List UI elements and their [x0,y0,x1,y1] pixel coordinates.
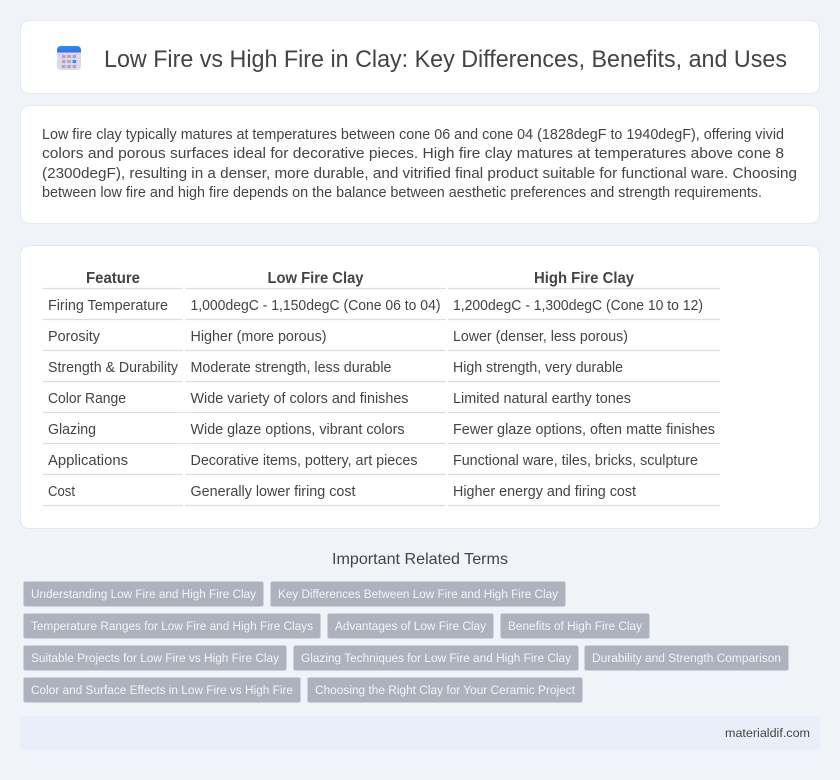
row: applications [48,453,698,469]
title: Low Fire vs High Fire in Clay: Key Differences, Benefits, and Uses [104,46,787,73]
row: applications: Applications [48,453,128,469]
row: porosity [48,329,628,345]
intro text: between low fire and high fire depends on the balance between aesthetic preferences and strength requirements. [42,185,762,201]
table header [86,270,634,287]
row: color range [48,391,631,407]
tags: related terms: Understanding Low Fire and High Fire Clay [31,587,257,601]
row: porosity: Porosity [48,329,101,345]
panel: introduction [20,106,820,224]
row: applications: Functional ware, tiles, bricks, sculpture [453,453,698,469]
footer: materialdif.com [725,726,810,740]
tags: related terms: Benefits of High Fire Clay [508,619,643,633]
row: color range: Limited natural earthy tones [453,391,631,407]
row: firing temperature: 1,000degC - 1,150degC (Cone 06 to 04) [190,298,440,314]
tags: related terms: Glazing Techniques for Low Fire and High Fire Clay [301,651,572,665]
table header: Feature [86,270,140,287]
row: firing temperature: 1,200degC - 1,300degC (Cone 10 to 12) [453,298,703,314]
tags: related terms: Suitable Projects for Low Fire vs High Fire Clay [31,651,280,665]
row: strength and durability [48,360,623,376]
row: firing temperature [48,298,703,314]
footer [20,716,820,750]
table header: Low Fire Clay [268,270,364,287]
row: glazing [48,422,715,438]
row: porosity: Higher (more porous) [190,329,326,345]
tags: related terms: Temperature Ranges for Low Fire and High Fire Clays [31,619,313,633]
row: cost: Generally lower firing cost [190,484,356,500]
row: cost: Higher energy and firing cost [453,484,636,500]
tags: related terms: Key Differences Between Low Fire and High Fire Clay [278,587,559,601]
tags: related terms: Advantages of Low Fire Clay [335,619,487,633]
row: color range: Wide variety of colors and finishes [190,391,408,407]
row: cost [48,484,636,500]
row: strength and durability: High strength, very durable [453,360,623,376]
tags: related terms: Choosing the Right Clay for Your Ceramic Project [315,683,576,697]
panel: title header [20,20,820,94]
row: glazing: Glazing [48,422,96,438]
intro text [42,127,797,201]
icon: calendar [57,46,81,70]
row: strength and durability: Moderate strength, less durable [190,360,392,376]
intro text: (2300degF), resulting in a denser, more durable, and vitrified final product suitable for functional ware. Choosing [42,166,797,182]
row: cost: Cost [48,484,75,500]
row: glazing: Wide glaze options, vibrant colors [190,422,404,438]
panel: comparison table [20,246,820,528]
row: firing temperature: Firing Temperature [48,298,168,314]
heading: important related terms: Important Related Terms [332,551,508,568]
row: strength and durability: Strength & Durability [48,360,179,376]
tags: related terms [24,582,788,702]
tags: related terms: Durability and Strength Comparison [592,651,781,665]
tags: related terms: Color and Surface Effects in Low Fire vs High Fire [31,683,293,697]
row: glazing: Fewer glaze options, often matte finishes [453,422,715,438]
row: color range: Color Range [48,391,126,407]
intro text: Low fire clay typically matures at temperatures between cone 06 and cone 04 (1828degF to 1940degF), offering vivid [42,127,784,143]
row: porosity: Lower (denser, less porous) [453,329,628,345]
table header: High Fire Clay [534,270,634,287]
row: applications: Decorative items, pottery, art pieces [190,453,418,469]
intro text: colors and porous surfaces ideal for decorative pieces. High fire clay matures at temperatures above cone 8 [42,146,784,162]
